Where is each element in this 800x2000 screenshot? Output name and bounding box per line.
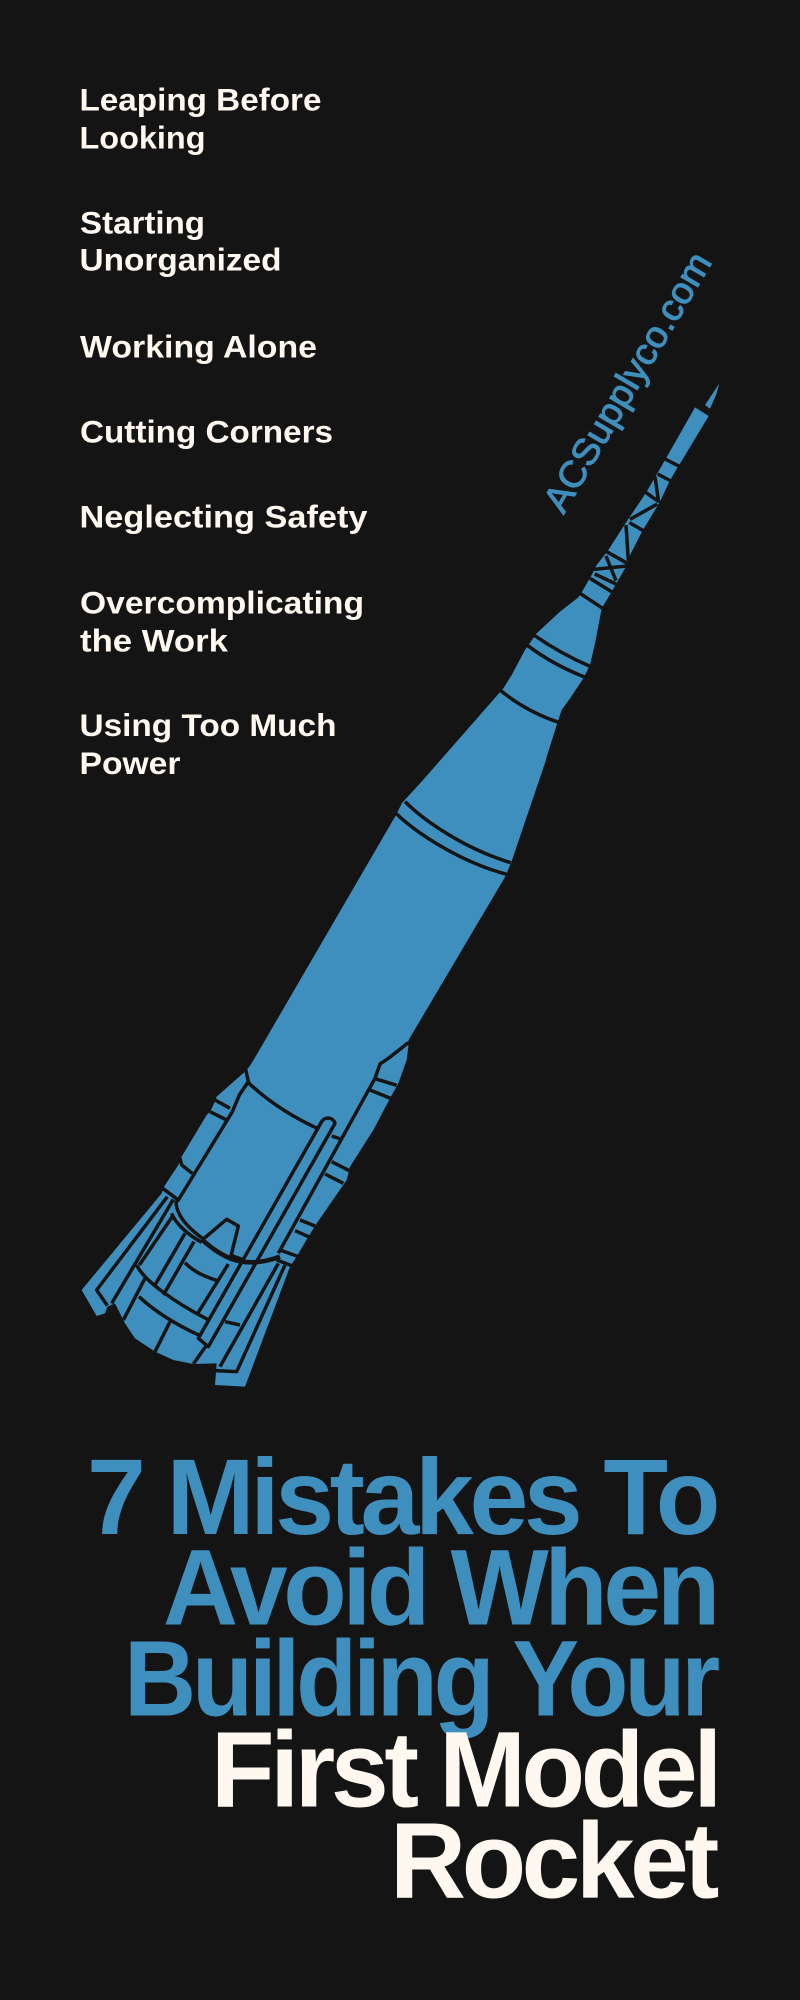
mistake: Neglecting Safety: Neglecting Safety <box>80 498 368 534</box>
mistake: Overcomplicating the Work <box>80 584 364 659</box>
mistake: Using Too Much Power: Power <box>80 745 180 781</box>
website url: ACSupplyco.com <box>535 245 720 519</box>
mistake: Using Too Much Power: Using Too Much <box>80 707 336 743</box>
mistake: Overcomplicating the Work: Overcomplicating <box>80 584 364 620</box>
title <box>87 1436 719 1921</box>
title: white lines: First Model <box>211 1709 718 1830</box>
mistake: Leaping Before Looking: Looking <box>80 119 206 155</box>
mistake: Starting Unorganized: Starting <box>80 204 205 240</box>
mistake: Starting Unorganized: Unorganized <box>80 242 282 278</box>
mistake: Working Alone: Working Alone <box>80 329 317 365</box>
mistake: Starting Unorganized <box>80 204 282 278</box>
mistake: Leaping Before Looking <box>80 82 322 155</box>
rocket main body <box>250 715 546 1067</box>
title: white lines: Rocket <box>390 1800 718 1921</box>
rocket engine section with boosters <box>82 1040 408 1387</box>
body ring bands <box>396 802 511 874</box>
title: white lines <box>211 1709 718 1921</box>
title: blue lines: Building Your <box>124 1618 719 1739</box>
mistake: Overcomplicating the Work: the Work <box>80 623 229 659</box>
mistake: Cutting Corners: Cutting Corners <box>80 413 333 449</box>
title: blue lines <box>87 1436 719 1739</box>
list of seven mistakes <box>80 82 368 781</box>
mistake: Using Too Much Power <box>80 707 336 781</box>
title: blue lines: Avoid When <box>163 1527 716 1648</box>
title: blue lines: 7 Mistakes To <box>87 1436 717 1557</box>
icon: rocket <box>82 383 719 1387</box>
rocket nose and upper stage <box>480 383 719 763</box>
mistake: Leaping Before Looking: Leaping Before <box>80 82 322 118</box>
